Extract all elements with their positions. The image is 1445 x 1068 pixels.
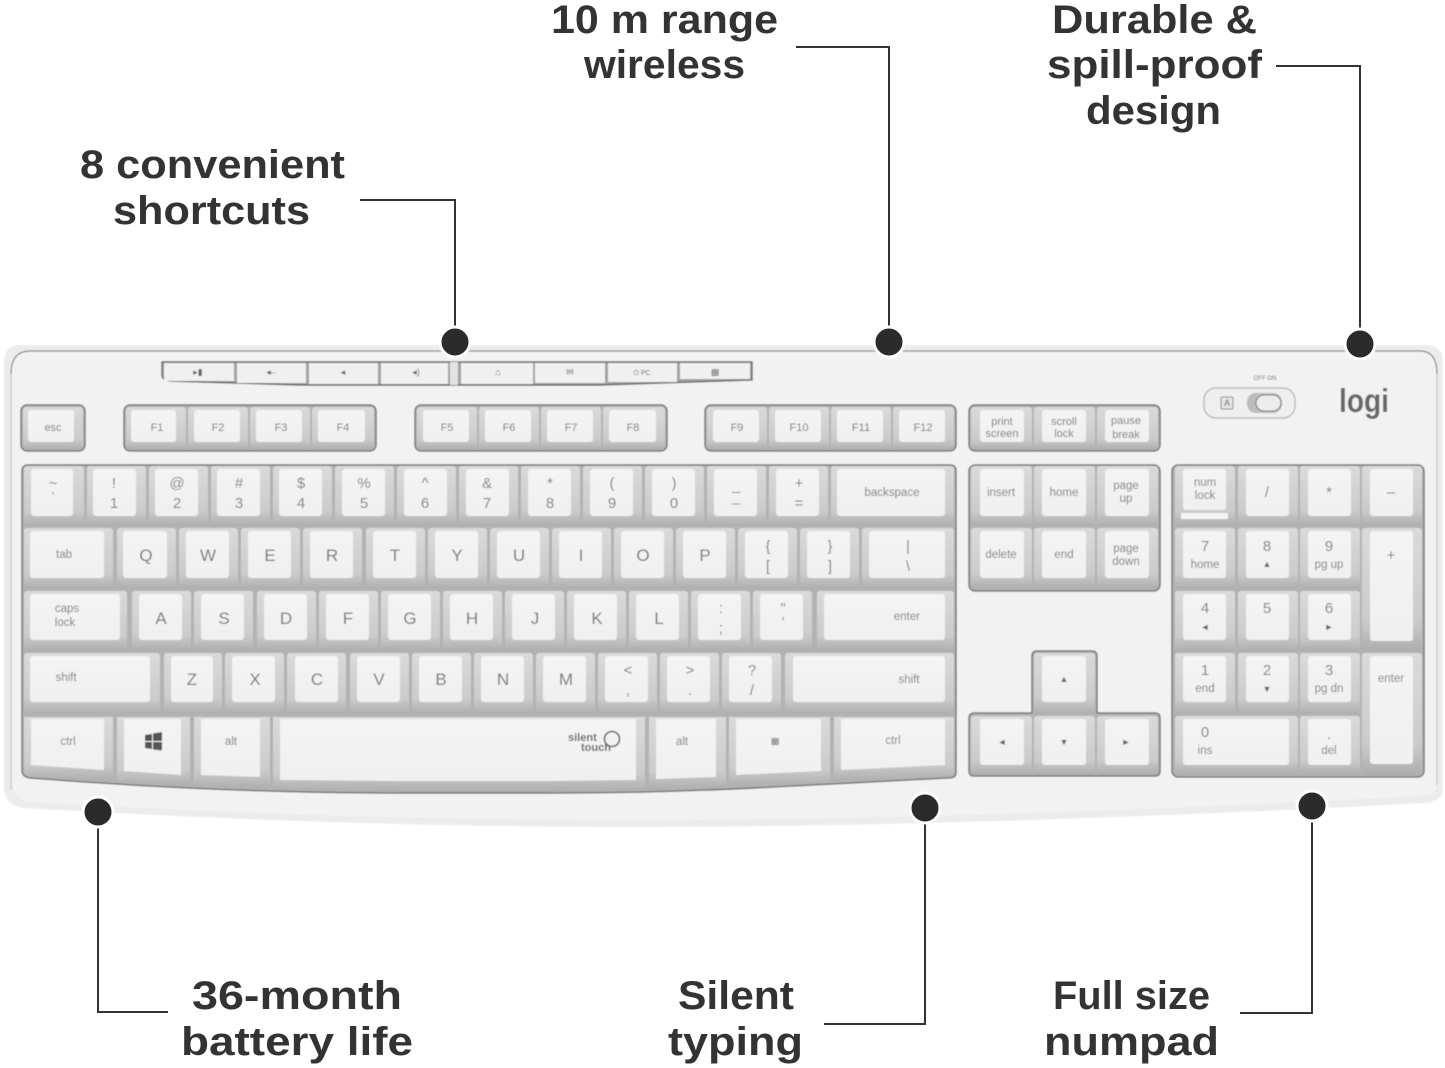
numeric keypad: 9: [1325, 538, 1333, 555]
callout: 10 m range wireless: wireless: [583, 43, 745, 87]
home row: [24, 591, 954, 651]
callout: durable and spill-proof design: [1047, 0, 1375, 359]
function keys F1-F4: F3: [275, 422, 287, 434]
bottom letter row: ?: [748, 662, 756, 679]
callout: 36-month battery life: 36-month: [192, 974, 402, 1018]
numeric keypad: pg dn: [1315, 683, 1343, 695]
number row: –: [732, 495, 741, 512]
function keys F9-F12: F9: [731, 422, 743, 434]
home row: ;: [719, 620, 723, 637]
home row: F: [343, 609, 353, 628]
numeric keypad: [1172, 465, 1424, 777]
number row: 6: [421, 495, 429, 512]
number row: %: [357, 475, 371, 492]
home row: D: [280, 609, 292, 628]
number row: [24, 466, 954, 526]
QWERTY row: O: [636, 546, 650, 565]
number row: 1: [110, 495, 118, 512]
number row: #: [235, 475, 244, 492]
silent touch logo: silent: [568, 732, 597, 744]
numeric keypad: –: [1387, 484, 1396, 501]
numeric keypad: ▼: [1263, 684, 1271, 694]
media shortcut keys: ⌂: [495, 367, 501, 377]
media shortcut keys: ◂: [341, 367, 346, 377]
function keys F1-F4: [124, 405, 376, 451]
number row: ~: [49, 475, 58, 492]
number row: ): [672, 475, 676, 492]
bottom letter row: V: [373, 670, 385, 689]
QWERTY row: \: [906, 558, 911, 575]
number row: `: [50, 490, 56, 507]
QWERTY row: {: [765, 538, 771, 555]
function keys F5-F8: F8: [627, 422, 639, 434]
home row: A: [155, 609, 167, 628]
bottom modifier row: alt: [676, 736, 689, 748]
numeric keypad: 8: [1263, 538, 1271, 555]
home row: :: [719, 600, 723, 617]
number row: $: [297, 475, 306, 492]
home row: lock: [55, 617, 75, 629]
numeric keypad: num: [1194, 477, 1216, 489]
numeric keypad: /: [1265, 484, 1270, 501]
QWERTY row: [: [766, 558, 771, 575]
function keys F1-F4: F4: [337, 422, 349, 434]
home row: ': [782, 614, 785, 631]
bottom modifier row: [24, 717, 954, 792]
print screen, scroll lock, pause keys: screen: [985, 428, 1019, 440]
bottom letter row: ,: [626, 682, 630, 699]
navigation cluster: down: [1112, 556, 1140, 568]
bottom letter row: M: [559, 670, 573, 689]
media shortcut keys: ◂–: [266, 367, 276, 377]
bottom letter row: C: [311, 670, 323, 689]
number row: !: [112, 475, 116, 492]
number row: 7: [483, 495, 491, 512]
QWERTY row: R: [326, 546, 338, 565]
number row: 4: [297, 495, 305, 512]
numeric keypad: 3: [1325, 662, 1333, 679]
silent touch logo: [568, 732, 620, 754]
bottom letter row: shift: [55, 672, 77, 684]
keyboard body: [4, 345, 1443, 827]
keyboard: [4, 345, 1443, 827]
home row: enter: [894, 611, 920, 623]
numeric keypad: ►: [1325, 622, 1333, 632]
number row: (: [610, 475, 614, 492]
media shortcut keys: ▸▮: [193, 367, 203, 377]
arrow keys: ►: [1122, 737, 1130, 747]
home row: caps: [55, 603, 79, 615]
numeric keypad: .: [1327, 726, 1331, 743]
numeric keypad: 7: [1201, 538, 1209, 555]
navigation cluster: [969, 465, 1160, 591]
silent touch logo: touch: [581, 742, 611, 754]
number row: _: [731, 477, 741, 494]
bottom letter row: >: [686, 662, 695, 679]
callout: full size numpad: Full size: [1053, 974, 1210, 1018]
callout: 8 convenient shortcuts: 8 convenient: [80, 143, 345, 187]
function keys F9-F12: F12: [914, 422, 932, 434]
numeric keypad: enter: [1378, 673, 1404, 685]
callout: durable and spill-proof design: design: [1086, 89, 1221, 133]
number row: 5: [360, 495, 368, 512]
numeric keypad: lock: [1195, 490, 1215, 502]
escape key: esc: [44, 422, 62, 434]
power switch: [1204, 376, 1295, 418]
numeric keypad: del: [1321, 745, 1337, 757]
callout: full size numpad: numpad: [1044, 1020, 1219, 1064]
function keys F5-F8: F7: [565, 422, 577, 434]
QWERTY row: Y: [451, 546, 463, 565]
navigation cluster: home: [1050, 487, 1078, 499]
function keys F9-F12: [705, 405, 956, 451]
QWERTY row: W: [200, 546, 216, 565]
home row: L: [654, 609, 664, 628]
callout: silent typing: [668, 793, 940, 1064]
callout: 36-month battery life: [83, 797, 413, 1064]
bottom letter row: .: [688, 682, 692, 699]
numeric keypad: ◄: [1201, 622, 1209, 632]
bottom letter row: Z: [187, 670, 197, 689]
number row: &: [482, 475, 492, 492]
numeric keypad: 4: [1201, 600, 1209, 617]
bottom letter row: N: [497, 670, 509, 689]
bottom letter row: /: [750, 682, 755, 699]
number row: 9: [608, 495, 616, 512]
bottom letter row: shift: [898, 674, 920, 686]
home row: ": [780, 600, 786, 617]
navigation cluster: end: [1054, 549, 1074, 561]
number row: *: [547, 475, 553, 492]
function keys F1-F4: F1: [151, 422, 163, 434]
number row: 3: [235, 495, 243, 512]
callout: full size numpad: [1044, 791, 1327, 1064]
function keys F1-F4: F2: [212, 422, 224, 434]
media shortcut keys: ⏻ PC: [633, 369, 651, 377]
media shortcut keys: ✉: [566, 367, 574, 377]
QWERTY row: }: [827, 538, 833, 555]
bottom modifier row: alt: [225, 736, 238, 748]
QWERTY row: |: [906, 538, 910, 555]
print screen, scroll lock, pause keys: scroll: [1051, 416, 1077, 428]
callout: silent typing: typing: [668, 1020, 803, 1064]
print screen, scroll lock, pause keys: [969, 405, 1160, 451]
numeric keypad: pg up: [1315, 559, 1343, 571]
QWERTY row: T: [390, 546, 400, 565]
navigation cluster: up: [1120, 493, 1132, 505]
power switch: OFF ON: [1254, 376, 1276, 382]
number row: 0: [670, 495, 678, 512]
numeric keypad: 6: [1325, 600, 1333, 617]
main key block: [22, 465, 956, 793]
numeric keypad: end: [1195, 683, 1215, 695]
print screen, scroll lock, pause keys: pause: [1111, 415, 1141, 427]
bottom letter row: [24, 653, 954, 714]
home row: G: [403, 609, 417, 628]
number row: @: [169, 475, 185, 492]
numeric keypad: 0: [1201, 724, 1209, 741]
number row: 8: [546, 495, 554, 512]
home row: K: [591, 609, 603, 628]
number row: ^: [421, 475, 429, 492]
numeric keypad: home: [1191, 559, 1219, 571]
icon: windows logo: [145, 732, 162, 750]
callout: silent typing: Silent: [678, 974, 794, 1018]
home row: J: [531, 609, 539, 628]
bottom modifier row: ctrl: [885, 735, 901, 747]
arrow keys: ▲: [1060, 674, 1068, 684]
navigation cluster: page: [1113, 543, 1139, 555]
print screen, scroll lock, pause keys: break: [1112, 429, 1140, 441]
escape key: [21, 405, 85, 451]
bottom letter row: <: [624, 662, 633, 679]
function keys F5-F8: F6: [503, 422, 515, 434]
bottom letter row: X: [249, 670, 261, 689]
callout: durable and spill-proof design: spill-proof: [1047, 43, 1263, 87]
print screen, scroll lock, pause keys: lock: [1054, 428, 1074, 440]
QWERTY row: [24, 528, 954, 589]
bottom letter row: B: [435, 670, 447, 689]
number row: backspace: [865, 487, 919, 499]
number row: +: [795, 475, 804, 492]
print screen, scroll lock, pause keys: print: [991, 416, 1013, 428]
callout: 10 m range wireless: [551, 0, 904, 357]
QWERTY row: U: [513, 546, 525, 565]
numeric keypad: ins: [1198, 745, 1213, 757]
number row: =: [795, 495, 804, 512]
QWERTY row: ]: [828, 558, 832, 575]
arrow keys: ▼: [1060, 737, 1068, 747]
QWERTY row: E: [264, 546, 276, 565]
QWERTY row: Q: [139, 546, 153, 565]
home row: H: [466, 609, 478, 628]
function keys F9-F12: F10: [790, 422, 808, 434]
logo: logi: logi: [1339, 382, 1389, 419]
navigation cluster: insert: [987, 487, 1016, 499]
bottom modifier row: ctrl: [60, 736, 76, 748]
numeric keypad: 2: [1263, 662, 1271, 679]
numeric keypad: *: [1326, 484, 1332, 501]
callout: 8 convenient shortcuts: shortcuts: [113, 189, 310, 233]
home row: S: [218, 609, 230, 628]
number row: 2: [173, 495, 181, 512]
QWERTY row: P: [699, 546, 711, 565]
numeric keypad: ▲: [1263, 559, 1271, 569]
power switch: A: [1224, 398, 1230, 408]
media shortcut keys: [162, 362, 752, 385]
navigation cluster: delete: [985, 549, 1017, 561]
QWERTY row: tab: [56, 549, 72, 561]
callout: 36-month battery life: battery life: [181, 1020, 413, 1064]
numeric keypad: +: [1387, 547, 1396, 564]
QWERTY row: I: [579, 546, 583, 565]
arrow keys: ◄: [998, 737, 1006, 747]
media shortcut keys: ◂): [412, 367, 420, 377]
function keys F5-F8: F5: [441, 422, 453, 434]
navigation cluster: page: [1113, 480, 1139, 492]
media shortcut keys: ▦: [711, 367, 719, 377]
callout: 8 convenient shortcuts: [80, 143, 470, 357]
numeric keypad: 1: [1201, 662, 1209, 679]
numeric keypad: 5: [1263, 600, 1271, 617]
function keys F5-F8: [415, 405, 667, 451]
bottom modifier row: ▦: [771, 736, 779, 746]
function keys F9-F12: F11: [852, 422, 870, 434]
arrow keys: [969, 651, 1160, 776]
